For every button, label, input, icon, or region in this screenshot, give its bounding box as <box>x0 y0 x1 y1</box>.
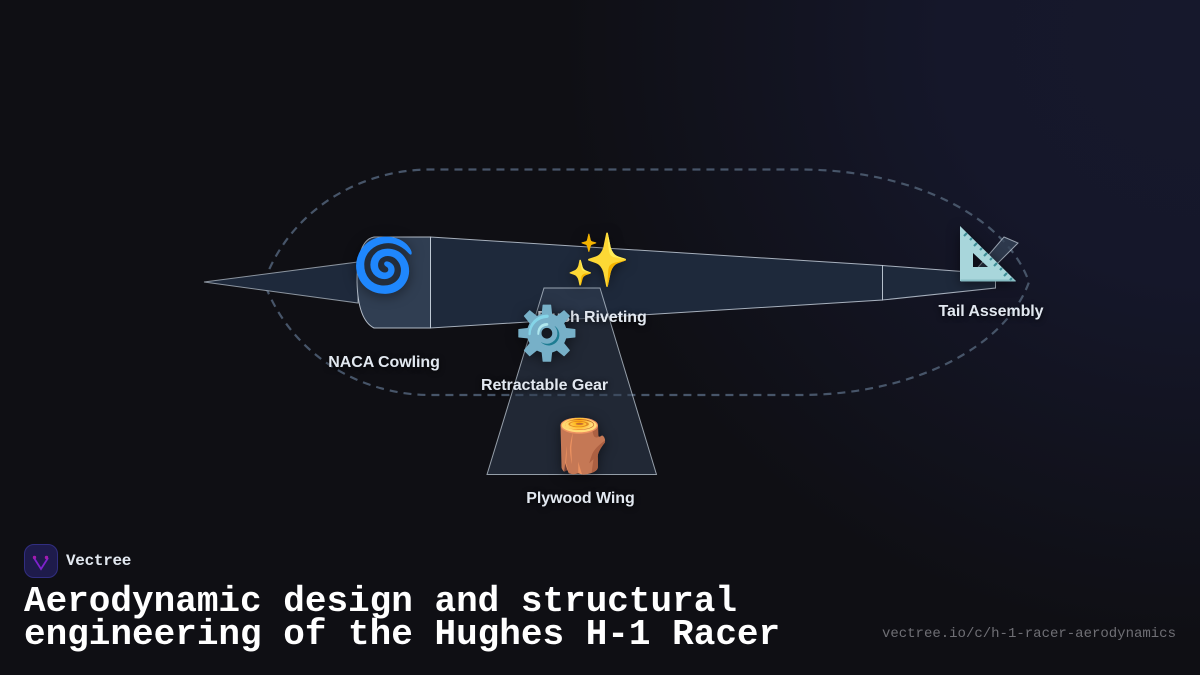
icon: gear: ⚙️ <box>515 303 579 364</box>
brand name: Vectree <box>66 552 131 570</box>
label: naca cowling: NACA Cowling <box>328 354 440 371</box>
fuselage <box>430 237 882 328</box>
dashed airflow envelope <box>264 170 1029 395</box>
cowling <box>357 237 430 328</box>
icon: log: 🪵 <box>549 416 613 477</box>
source url: vectree.io/c/h-1-racer-aerodynamics <box>882 626 1176 642</box>
tail fin <box>962 237 1018 286</box>
label: retractable gear: Retractable Gear <box>481 377 608 394</box>
rear fuselage <box>882 266 996 300</box>
brand logo <box>24 544 58 578</box>
label: flush riveting: Flush Riveting <box>537 309 647 326</box>
label: plywood wing: Plywood Wing <box>526 490 635 507</box>
wing <box>487 288 656 474</box>
nose spinner cone <box>204 262 358 303</box>
title <box>24 581 780 655</box>
icon: triangular ruler <box>952 226 1016 292</box>
title: engineering of the Hughes H-1 Racer <box>24 614 780 655</box>
icon: cyclone: 🌀 <box>352 235 416 296</box>
label: tail assembly: Tail Assembly <box>938 303 1044 320</box>
icon: sparkles: ✨ <box>566 230 630 291</box>
title: Aerodynamic design and structural <box>24 581 737 622</box>
